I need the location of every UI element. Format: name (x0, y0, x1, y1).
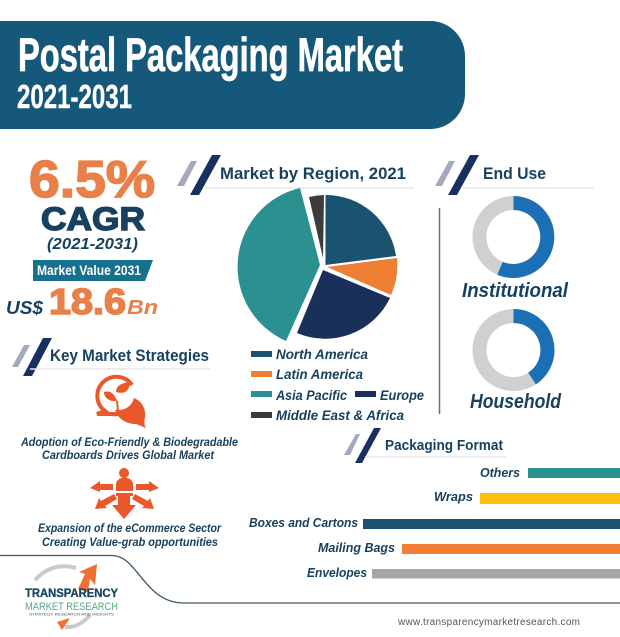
legend: asia pacific: Asia Pacific (275, 388, 347, 403)
bar: envelopes: Envelopes (307, 565, 367, 580)
slice: asia pacific (238, 188, 320, 341)
CAGR label: CAGR (41, 201, 145, 237)
legend: north america: North America (276, 347, 368, 362)
market value ribbon: Market Value 2031 (37, 263, 141, 278)
bar: mailing bags: Mailing Bags (318, 540, 395, 555)
slice: middle east and africa (309, 195, 324, 258)
slice: north america (326, 195, 396, 265)
market value (6, 281, 158, 322)
bar: others (480, 465, 620, 480)
icon: eco leaf (97, 377, 146, 428)
subtitle years: 2021-2031 (17, 78, 132, 115)
bar: mailing bags (318, 540, 620, 555)
logo: transparency market research: MARKET RESEARCH (25, 601, 118, 613)
title banner (0, 21, 465, 129)
website url: www.transparencymarketresearch.com (397, 617, 580, 628)
bar chart: packaging format (249, 465, 620, 580)
market value: Bn (127, 297, 158, 319)
pie chart (238, 188, 397, 341)
heading: key market strategies: Key Market Strategies (50, 346, 209, 365)
heading: market by region: Market by Region, 2021 (220, 164, 406, 183)
donut: household (480, 316, 548, 384)
legend: europe: Europe (380, 388, 424, 403)
CAGR years: (2021-2031) (47, 236, 138, 253)
market value: 18.6 (49, 281, 126, 322)
text: eco friendly strategy: Cardboards Drives Global Market (42, 450, 215, 462)
legend: latin america: Latin America (276, 367, 363, 382)
slice: latin america (327, 258, 397, 295)
heading: packaging format: Packaging Format (385, 438, 503, 454)
text: eco friendly strategy: Adoption of Eco-Friendly & Biodegradable (20, 437, 239, 449)
bar: others: Others (480, 465, 520, 480)
logo: transparency market research: STRATEGY RESEARCH AND INSIGHTS (29, 612, 114, 616)
market value: US$ (6, 298, 44, 318)
heading: key market strategies (12, 338, 210, 376)
bar: wraps (434, 489, 620, 504)
market value ribbon (33, 260, 153, 281)
icon: person with arrows (90, 468, 159, 519)
logo: transparency market research (25, 564, 118, 630)
heading: end use: End Use (483, 164, 546, 183)
text: ecommerce strategy: Expansion of the eCommerce Sector (38, 523, 221, 535)
text: eco friendly strategy (20, 437, 239, 462)
legend: middle east and africa: Middle East & Africa (276, 408, 404, 423)
legend (251, 347, 424, 423)
slice: europe (297, 270, 390, 339)
bar: boxes and cartons (249, 515, 620, 530)
legend: europe (355, 388, 424, 403)
CAGR block (6, 151, 158, 322)
CAGR value: 6.5% (29, 151, 155, 209)
bar: envelopes (307, 565, 620, 580)
title: Postal Packaging Market (18, 28, 403, 81)
logo: transparency market research: TRANSPARENCY (25, 588, 118, 600)
bar: boxes and cartons: Boxes and Cartons (249, 515, 358, 530)
text: ecommerce strategy: Creating Value-grab opportunities (42, 537, 218, 549)
donut: institutional (480, 203, 548, 271)
text: ecommerce strategy (38, 523, 221, 549)
label: household: Household (470, 391, 562, 413)
bar: wraps: Wraps (434, 489, 473, 504)
heading: packaging format (344, 428, 506, 463)
label: institutional: Institutional (462, 280, 568, 302)
heading: market by region (177, 155, 414, 195)
heading: end use (435, 155, 594, 195)
